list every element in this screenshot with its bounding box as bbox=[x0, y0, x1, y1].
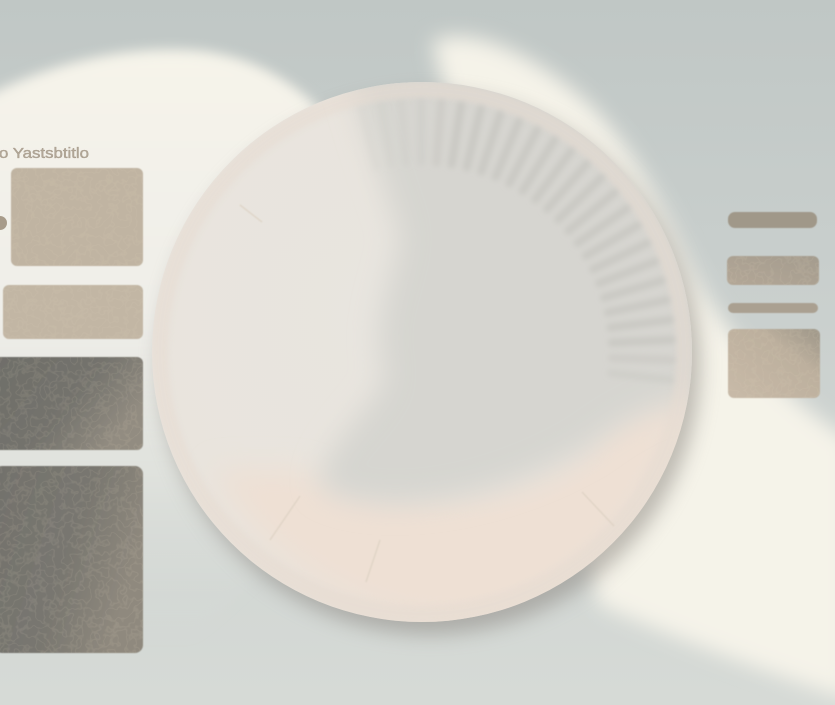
plate shadow area bbox=[322, 82, 692, 508]
left marker dot bbox=[0, 216, 7, 230]
card vein texture bbox=[0, 358, 142, 652]
card: left 3 bbox=[0, 357, 143, 450]
plate cast shadow bbox=[160, 94, 700, 634]
right bar 2 bbox=[727, 256, 819, 285]
plate ribs bbox=[450, 104, 673, 345]
card: left 1 bbox=[11, 168, 143, 266]
card: left 2 bbox=[3, 285, 143, 339]
card: right bbox=[728, 329, 820, 398]
light patch: upper left bbox=[0, 49, 335, 660]
heading text: o Yastsbtitlo bbox=[0, 146, 89, 162]
plate bbox=[152, 60, 720, 622]
plate warm rim bbox=[246, 482, 564, 570]
light patch: right bbox=[432, 36, 835, 700]
right bar 3 bbox=[728, 303, 818, 313]
plate rim ring bbox=[372, 86, 688, 382]
plate rim fold marks bbox=[240, 205, 614, 582]
card: left 4 bbox=[0, 466, 143, 653]
right bar 1 bbox=[728, 212, 817, 228]
